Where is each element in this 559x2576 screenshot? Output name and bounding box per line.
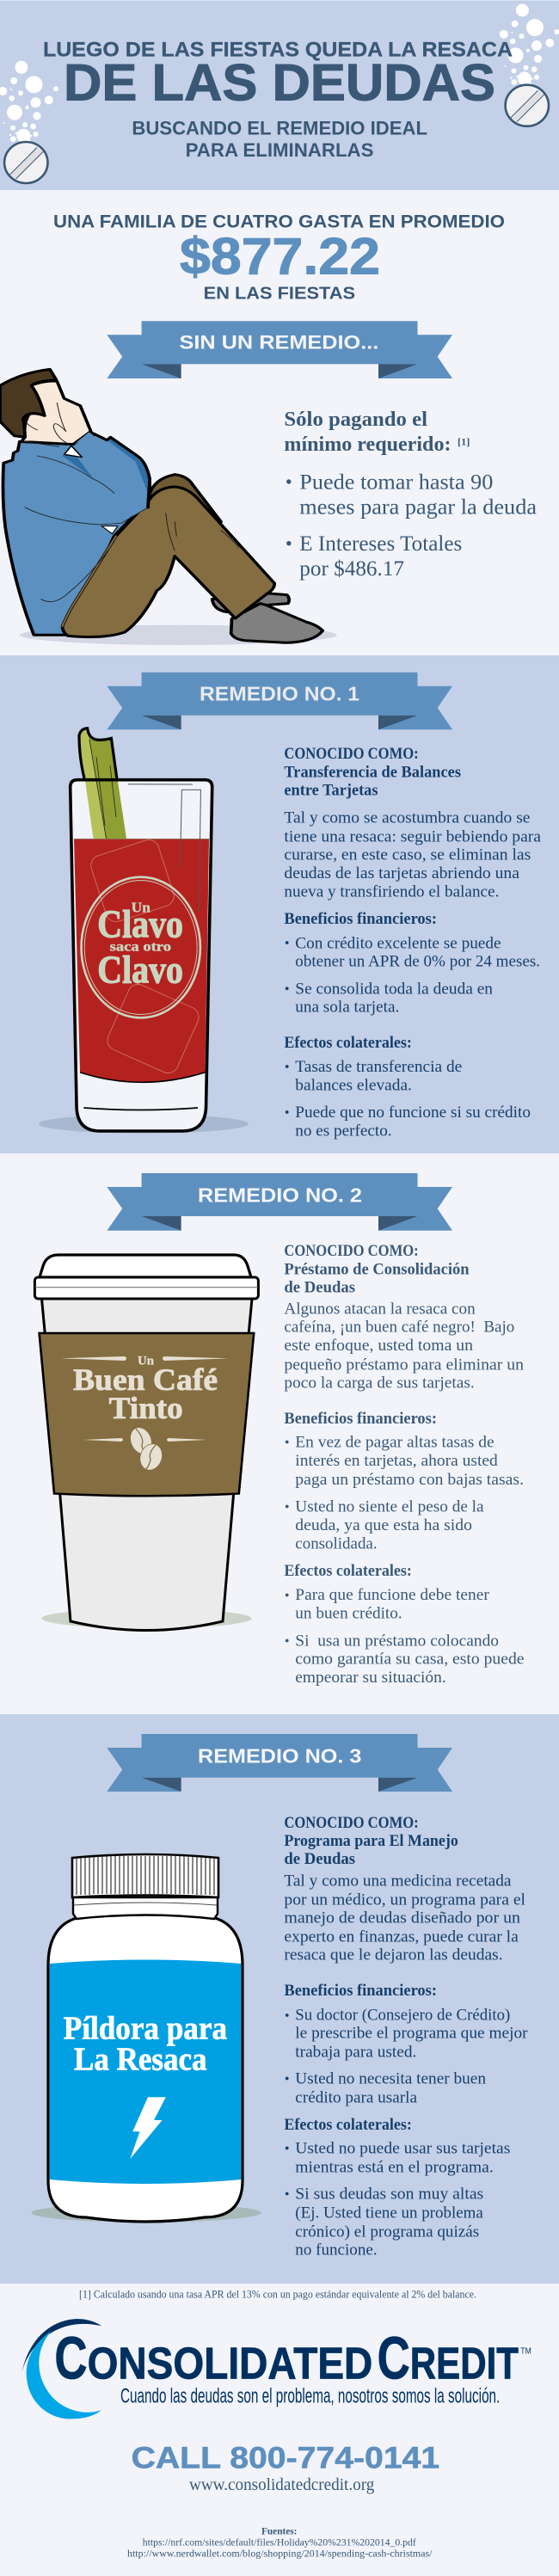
side effects	[284, 1034, 531, 1140]
description: nueva y transfiriendo el balance.	[284, 882, 499, 901]
illustration: coffee cup	[34, 1255, 258, 1631]
wordmark: C	[378, 2324, 410, 2391]
text block: minimum payment facts	[284, 409, 537, 581]
description: Tal y como se acostumbra cuando se	[284, 809, 530, 827]
subtitle: BUSCANDO EL REMEDIO IDEAL	[132, 118, 427, 139]
financial benefits: Beneficios financieros:	[284, 910, 437, 928]
side effects: (Ej. Usted tiene un problema	[295, 2204, 483, 2222]
financial benefits: consolidada.	[295, 1534, 378, 1552]
description: resaca que le dejaron las deudas.	[284, 1946, 503, 1964]
wordmark: TM	[520, 2347, 531, 2357]
side effects: mientras está en el programa.	[295, 2158, 494, 2176]
stat lead-in: UNA FAMILIA DE CUATRO GASTA EN PROMEDIO	[53, 212, 505, 231]
bottle neck	[73, 1897, 218, 1919]
financial benefits: Usted no siente el peso de la	[295, 1497, 484, 1515]
side effects: Si sus deudas son muy altas	[295, 2186, 483, 2204]
cup lid	[34, 1255, 258, 1299]
side effects: Tasas de transferencia de	[295, 1058, 462, 1076]
financial benefits: Beneficios financieros:	[284, 1982, 437, 2000]
panel: remedio 2	[34, 1173, 525, 1687]
description: pequeño préstamo para eliminar un	[284, 1356, 525, 1374]
illustration: pill bottle	[31, 1854, 261, 2222]
wordmark: REDIT	[410, 2339, 519, 2389]
sources: http://www.nerdwallet.com/blog/shopping/2014/spending-cash-christmas/	[127, 2548, 433, 2560]
label text	[64, 2011, 227, 2078]
icon: logo swoosh	[22, 2319, 101, 2419]
financial benefits: paga un préstamo con bajas tasas.	[295, 1471, 524, 1489]
financial benefits: Usted no necesita tener buen	[295, 2069, 487, 2087]
banner: remedio no. 1	[107, 673, 452, 729]
website: www.consolidatedcredit.org	[189, 2475, 374, 2494]
financial benefits: trabaja para usted.	[295, 2043, 416, 2061]
side effects: no funcione.	[295, 2241, 378, 2259]
side effects	[284, 1562, 525, 1687]
financial benefits: obtener un APR de 0% por 24 meses.	[295, 952, 540, 970]
known as: de Deudas	[284, 1850, 355, 1868]
side effects: crónico) el programa quizás	[295, 2222, 479, 2241]
known as	[284, 1814, 458, 1868]
call to action phone: CALL 800-774-0141	[132, 2441, 439, 2475]
panel: remedio 1	[0, 655, 559, 1153]
sources	[127, 2525, 433, 2560]
financial benefits: le prescribe el programa que mejor	[295, 2024, 528, 2042]
label text: La Resaca	[74, 2042, 206, 2078]
financial benefits: crédito para usarla	[295, 2088, 418, 2106]
description: curarse, en este caso, se eliminan las	[284, 845, 531, 864]
sources: https://nrf.com/sites/default/files/Holiday%20%231%202014_0.pdf	[143, 2536, 416, 2548]
banner: remedio no. 3	[107, 1734, 452, 1792]
description: deudas de las tarjetas abriendo una	[284, 864, 520, 882]
cup sleeve	[40, 1333, 254, 1496]
financial benefits	[284, 1982, 528, 2106]
text block: remedio 3 description	[284, 1814, 528, 2259]
side effects: empeorar su situación.	[295, 1669, 446, 1687]
side effects: Para que funcione debe tener	[295, 1586, 489, 1604]
description: manejo de deudas diseñado por un	[284, 1909, 521, 1927]
title: LUEGO DE LAS FIESTAS QUEDA LA RESACA	[43, 39, 513, 62]
icon: lightning bolt	[130, 2097, 166, 2159]
bottle body	[48, 1914, 243, 2222]
banner: sin un remedio: SIN UN REMEDIO...	[179, 331, 378, 353]
known as: CONOCIDO COMO:	[284, 1814, 419, 1832]
financial benefits	[284, 1410, 524, 1552]
ice cubes	[89, 837, 202, 1076]
cup sleeve: Buen Café	[73, 1362, 218, 1397]
heading: mínimo requerido:	[284, 433, 451, 456]
bullet list	[286, 470, 537, 581]
side effects: no es perfecto.	[295, 1122, 392, 1140]
description	[284, 1300, 525, 1392]
known as: CONOCIDO COMO:	[284, 745, 419, 763]
banner: sin un remedio	[107, 321, 452, 378]
label: un clavo saca otro clavo: saca otro	[110, 940, 171, 955]
financial benefits: Su doctor (Consejero de Crédito)	[295, 2006, 510, 2024]
text block: remedio 2 description	[284, 1242, 525, 1687]
side effects: Puede que no funcione si su crédito	[295, 1104, 531, 1122]
financial benefits: interés en tarjetas, ahora usted	[295, 1452, 498, 1470]
known as	[284, 1242, 470, 1296]
description: cafeína, ¡un buen café negro! Bajo	[284, 1318, 514, 1336]
bullet list: por $486.17	[299, 557, 404, 581]
description: este enfoque, usted toma un	[284, 1337, 474, 1355]
subtitle: PARA ELIMINARLAS	[186, 139, 373, 161]
known as: Transferencia de Balances	[284, 763, 461, 781]
known as: entre Tarjetas	[284, 781, 378, 799]
label: un clavo saca otro clavo: Un	[132, 900, 151, 916]
label text: Píldora para	[64, 2011, 227, 2047]
icon: celery stalk	[79, 729, 126, 839]
banner: remedio no. 2	[107, 1173, 452, 1231]
footnote: [1] Calculado usando una tasa APR del 13% con un pago estándar equivalente al 2% del balance.	[79, 2289, 476, 2301]
subtitle	[132, 118, 427, 161]
side effects: Efectos colaterales:	[284, 1034, 412, 1052]
banner: remedio no. 3: REMEDIO NO. 3	[198, 1744, 361, 1767]
title: DE LAS DEUDAS	[64, 53, 495, 112]
known as: CONOCIDO COMO:	[284, 1242, 419, 1260]
sources: Fuentes:	[261, 2525, 297, 2537]
bottle cap	[72, 1854, 218, 1897]
wordmark: C	[54, 2324, 88, 2391]
description: poco la carga de sus tarjetas.	[284, 1374, 475, 1392]
text block: remedio 1 description	[284, 745, 542, 1140]
financial benefits: En vez de pagar altas tasas de	[295, 1433, 494, 1451]
description	[284, 1872, 525, 1964]
description: tiene una resaca: seguir bebiendo para	[284, 827, 542, 845]
label: un clavo saca otro clavo	[81, 877, 200, 1017]
heading: Sólo pagando el	[284, 409, 427, 431]
description: por un médico, un programa para el	[284, 1891, 525, 1909]
illustration: bloody mary glass	[39, 729, 249, 1134]
banner: remedio no. 1: REMEDIO NO. 1	[200, 682, 359, 704]
cup sleeve: Tinto	[109, 1391, 183, 1425]
known as: Préstamo de Consolidación	[284, 1260, 470, 1278]
stat number: $877.22	[180, 226, 380, 285]
financial benefits: Con crédito excelente se puede	[295, 934, 501, 952]
illustration: man holding his head	[0, 369, 337, 645]
bottle label	[50, 1959, 241, 2184]
financial benefits	[284, 910, 540, 1017]
icon: left fizzing tablet	[0, 61, 58, 183]
financial benefits: Beneficios financieros:	[284, 1410, 437, 1428]
panel: header	[0, 0, 559, 190]
stat caption: EN LAS FIESTAS	[204, 285, 355, 304]
description: Tal y como una medicina recetada	[284, 1872, 512, 1890]
cup sleeve: Un	[138, 1355, 155, 1368]
financial benefits: una sola tarjeta.	[295, 999, 399, 1017]
heading: [1]	[458, 435, 470, 447]
financial benefits: deuda, ya que esta ha sido	[295, 1516, 472, 1534]
side effects: como garantía su casa, esto puede	[295, 1651, 525, 1669]
icon: coffee beans	[127, 1424, 166, 1473]
known as: Programa para El Manejo	[284, 1832, 458, 1850]
label: un clavo saca otro clavo: Clavo	[97, 948, 183, 992]
description: experto en finanzas, puede curar la	[284, 1927, 519, 1946]
panel: holiday spending stat	[53, 212, 505, 304]
financial benefits: Se consolida toda la deuda en	[295, 980, 494, 998]
bullet list: meses para pagar la deuda	[299, 495, 537, 519]
heading	[284, 409, 470, 456]
banner: remedio no. 2: REMEDIO NO. 2	[198, 1183, 362, 1206]
label: un clavo saca otro clavo: Clavo	[97, 901, 183, 945]
side effects	[284, 2116, 510, 2259]
description: Algunos atacan la resaca con	[284, 1300, 476, 1318]
bullet list: E Intereses Totales	[299, 532, 462, 556]
known as: de Deudas	[284, 1278, 355, 1296]
side effects: balances elevada.	[295, 1076, 412, 1094]
bullet list: Puede tomar hasta 90	[299, 470, 493, 494]
description	[284, 809, 542, 901]
wordmark: ONSOLIDATED	[88, 2339, 372, 2389]
side effects: Efectos colaterales:	[284, 1562, 412, 1580]
side effects: un buen crédito.	[295, 1604, 402, 1622]
logo: consolidated credit	[22, 2319, 531, 2419]
side effects: Si usa un préstamo colocando	[295, 1632, 499, 1650]
side effects: Efectos colaterales:	[284, 2116, 412, 2134]
icon: right fizzing tablet	[500, 3, 559, 126]
panel: remedio 3	[0, 1714, 559, 2284]
side effects: Usted no puede usar sus tarjetas	[295, 2139, 510, 2157]
wordmark	[54, 2324, 531, 2391]
known as	[284, 745, 461, 799]
